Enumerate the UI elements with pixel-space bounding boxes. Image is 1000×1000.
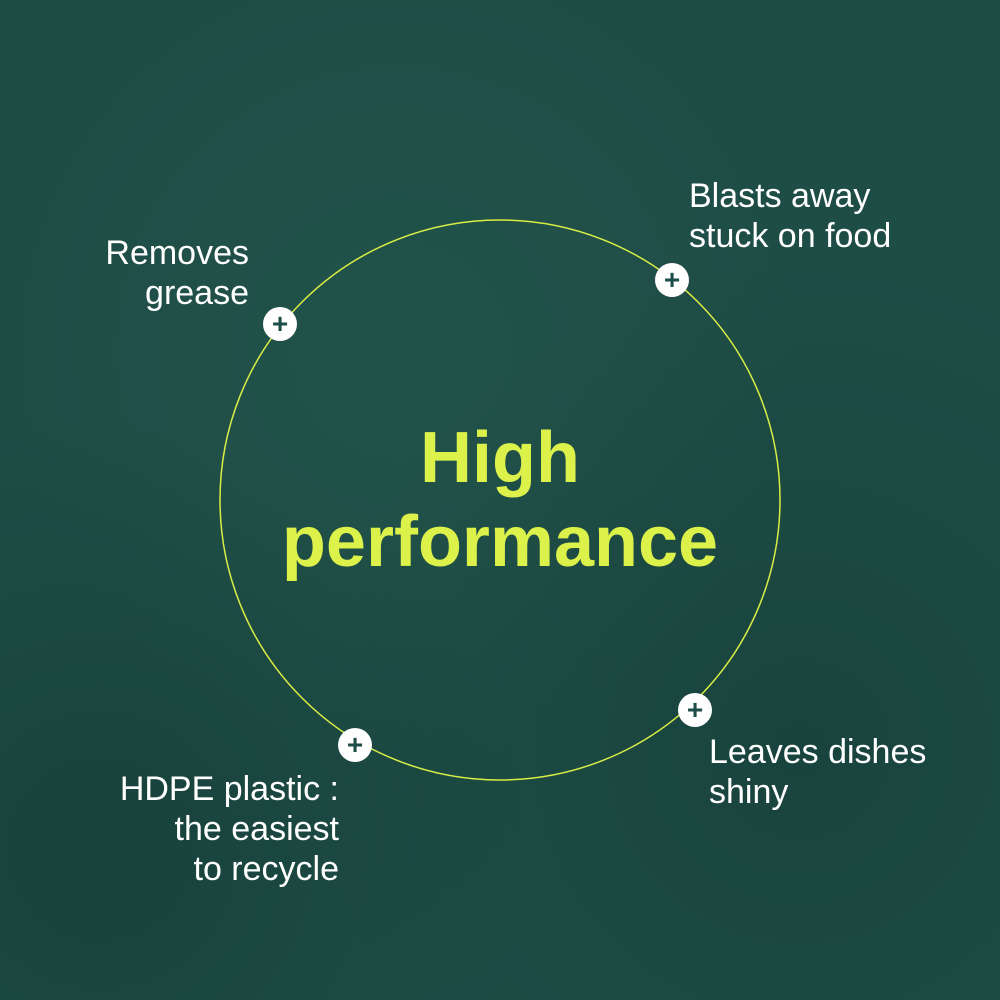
label: blasts away (689, 177, 891, 255)
label: blasts away: stuck on food (689, 217, 891, 255)
label: leaves dishes shiny (709, 733, 926, 811)
label: leaves dishes shiny: shiny (709, 773, 788, 811)
label: HDPE plastic: to recycle (194, 850, 339, 888)
label: HDPE plastic: the easiest (175, 810, 339, 848)
icon: plus removes grease: + (272, 308, 288, 339)
label: removes grease: Removes (105, 234, 249, 272)
label: leaves dishes shiny: Leaves dishes (709, 733, 926, 771)
title: performance (282, 502, 718, 582)
label: removes grease (105, 234, 249, 312)
icon: plus leaves dishes (678, 693, 712, 727)
label: HDPE plastic: HDPE plastic : (120, 770, 339, 808)
icon: plus leaves dishes: + (687, 694, 703, 725)
icon: plus HDPE: + (347, 729, 363, 760)
icon: plus blasts away (655, 263, 689, 297)
icon: plus removes grease (263, 307, 297, 341)
label: HDPE plastic (120, 770, 339, 888)
label: removes grease: grease (145, 274, 249, 312)
icon: plus blasts away: + (664, 264, 680, 295)
title: High (420, 418, 580, 498)
icon: plus HDPE (338, 728, 372, 762)
label: blasts away: Blasts away (689, 177, 870, 215)
title (282, 418, 718, 582)
